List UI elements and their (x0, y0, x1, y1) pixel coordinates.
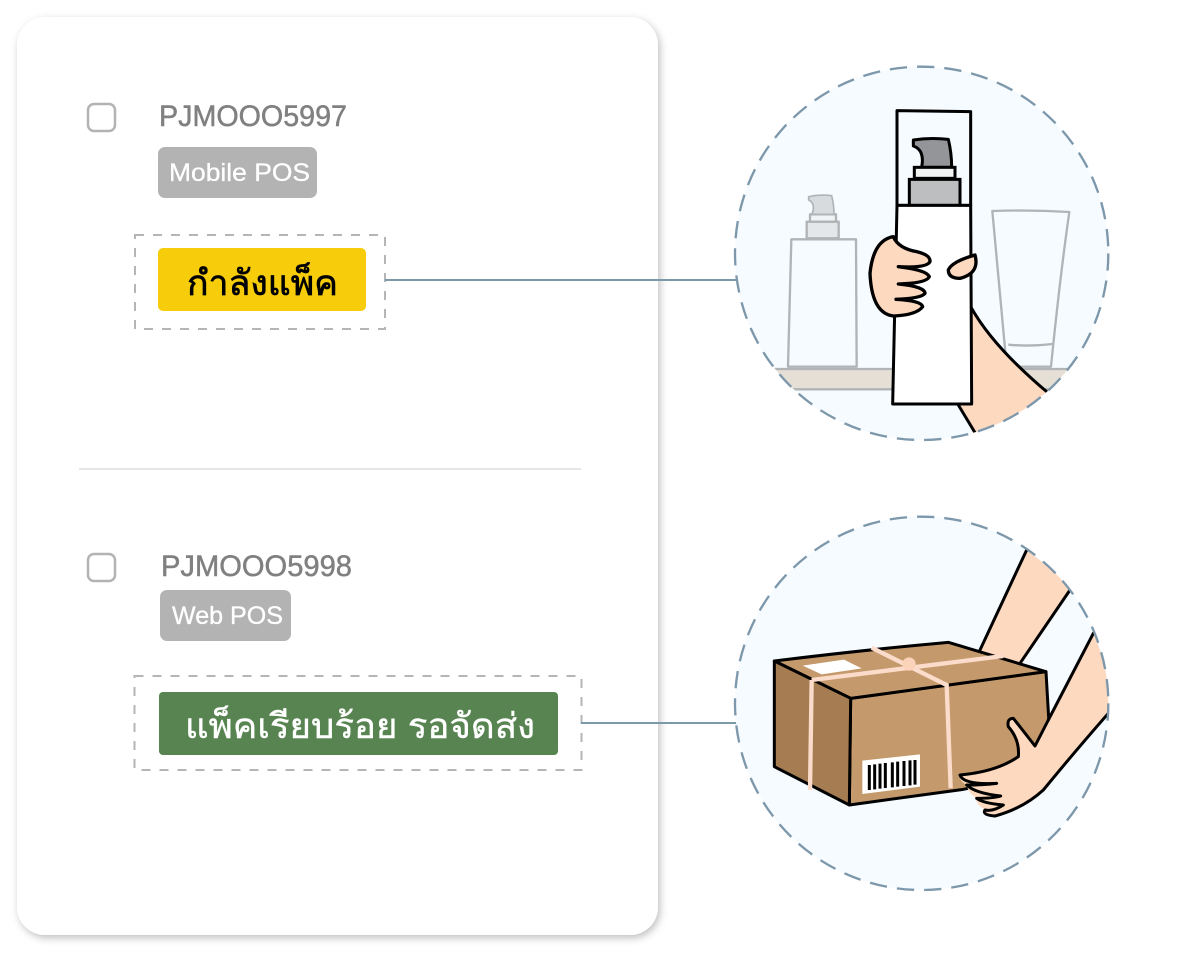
status badge: packed, awaiting shipment: แพ็คเรียบร้อย รอจัดส่ง (185, 705, 535, 746)
status highlight frame (134, 676, 582, 770)
barcode (862, 754, 920, 794)
dashed circle outline (735, 67, 1108, 440)
card background (17, 17, 658, 935)
lower arm and hand (960, 633, 1110, 816)
channel tag: Web POS: Web POS (172, 602, 283, 630)
parcel box (774, 642, 1049, 805)
illustration: hands holding parcel box in dashed circle (735, 517, 1110, 890)
channel tag: Mobile POS (158, 147, 317, 198)
order number: PJMOOO5998 (161, 550, 352, 583)
box front (849, 672, 1049, 805)
panel: order list card (17, 17, 658, 935)
order row: PJM0005998 (88, 550, 582, 770)
order row: PJM0005997 (88, 100, 385, 329)
thumb (948, 255, 976, 278)
illustration: hand holding bottle in dashed circle (730, 67, 1113, 440)
channel tag: Web POS (160, 590, 291, 641)
shipping label (803, 660, 862, 674)
box side (774, 661, 851, 805)
hand fingers gripping bottle (870, 237, 930, 316)
box top (774, 642, 1046, 698)
connector: packing status to bottle illustration (385, 279, 737, 281)
tape (810, 648, 1003, 790)
channel tag: Mobile POS: Mobile POS (169, 159, 310, 187)
shelf (774, 368, 1068, 390)
checkbox (88, 104, 115, 131)
status highlight frame (135, 235, 385, 329)
checkbox (88, 554, 115, 581)
order number: PJMOOO5997 (159, 100, 347, 133)
status badge: packed, awaiting shipment (159, 692, 558, 755)
arm (957, 307, 1048, 433)
foreground bottle (893, 111, 972, 404)
background pump bottle (788, 195, 857, 367)
background tube (992, 211, 1069, 367)
dashed circle outline (735, 517, 1108, 890)
connector: packed status to box illustration (581, 722, 737, 724)
status badge: packing (158, 248, 366, 311)
status badge: packing: กำลังแพ็ค (187, 262, 338, 303)
upper arm (980, 550, 1073, 667)
